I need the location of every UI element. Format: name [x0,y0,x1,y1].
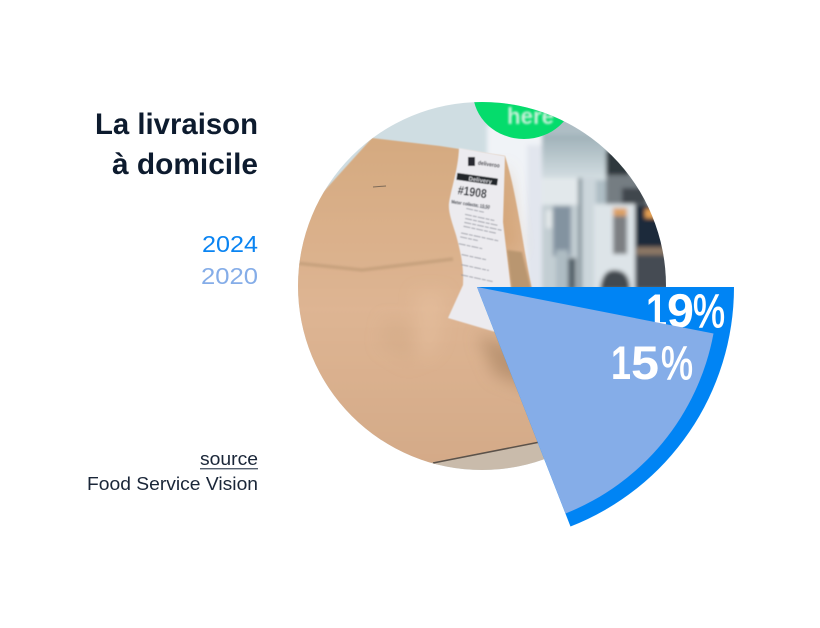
value: 15%: 5 [631,336,659,389]
receipt: deliveroo [477,161,500,170]
value: 19% [646,284,725,337]
value: 19%: 1 [646,284,667,337]
title: à domicile [112,148,258,181]
legend [201,231,258,289]
value: 15% [611,336,693,389]
pie wedge: 2024 [477,287,734,526]
source: Food Service Vision [87,473,258,494]
background shop [486,112,666,287]
source: source [200,448,258,469]
source [87,448,258,494]
bag shading [478,169,526,388]
receipt: Delivery [468,177,493,186]
pie wedge: 2020 [477,287,714,514]
green sign [474,102,564,139]
receipt: #1908 [457,183,488,201]
photo: delivery bag [298,102,666,470]
receipt: Meter collecte: 15:50 [451,199,490,211]
title [95,108,258,181]
title: La livraison [95,108,258,141]
bag fold [296,259,453,270]
green sign: here [507,103,554,129]
legend: 2020 [201,263,258,289]
value: 19%: 9 [667,284,694,337]
receipt [448,148,512,332]
value: 19%: % [693,284,725,337]
paper bag [298,138,538,464]
infographic [88,102,734,526]
value: 15%: 1 [611,336,631,389]
lower bag panel right of receipt [507,250,532,292]
legend: 2024 [202,231,258,257]
value: 15%: % [661,336,693,389]
table edge [432,443,544,470]
